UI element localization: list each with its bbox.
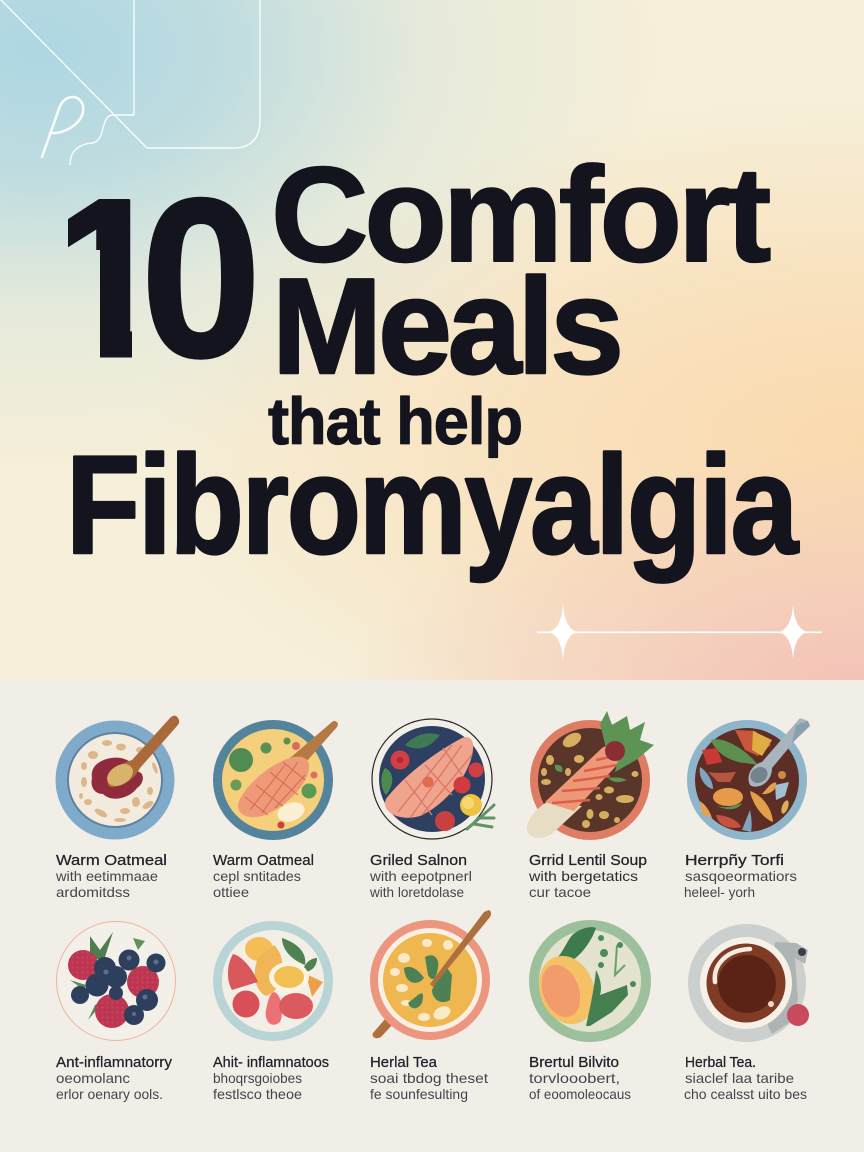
meal 5: stew with spoon icon: [687, 718, 810, 840]
meal 1 text: Warm Oatmeal: [56, 853, 167, 869]
meal 6 text: oeomolanc: [56, 1070, 130, 1086]
meal 9: green bowl icon: [529, 920, 651, 1042]
title: number 10: 0: [141, 151, 261, 404]
meal 2 text: cepl sntitades: [213, 868, 301, 884]
meal 8 text: soai tbdog theset: [370, 1070, 488, 1086]
meal 2 text: [213, 853, 314, 900]
meal 6 text: [56, 1055, 173, 1102]
meal 8 text: Herlal Tea: [370, 1055, 438, 1071]
meal 3 text: Griled Salnon: [370, 853, 467, 869]
meal 9 text: [529, 1055, 631, 1102]
meal 5 text: Herrpñy Torfi: [685, 853, 784, 869]
meal 10 text: [684, 1055, 807, 1102]
meal 8: golden soup icon: [370, 910, 491, 1040]
meal 2: salmon soup icon: [213, 720, 338, 840]
sparkle divider: [537, 604, 822, 660]
meal 7 text: festlsco theoe: [213, 1086, 302, 1102]
meal 10: herbal tea cup icon: [688, 924, 809, 1042]
meal 1 text: [55, 853, 167, 900]
title: that help: that help: [268, 384, 522, 458]
meal 3 text: with loretdolase: [369, 884, 464, 900]
meal 9 text: Brertul Bilvito: [529, 1055, 619, 1071]
decorative line art: top-left: [0, 0, 260, 165]
meal 7 text: Ahit- inflamnatoos: [213, 1055, 329, 1071]
meal 9 text: torvlooobert,: [529, 1070, 620, 1086]
meal 10 text: cho cealsst uito bes: [684, 1086, 807, 1102]
meal 1 text: with eetimmaae: [55, 868, 158, 884]
meal 10 text: siaclef laa taribe: [685, 1070, 794, 1086]
meal 7 text: bhoqrsgoiobes: [213, 1070, 302, 1086]
meal 4 text: cur tacoe: [529, 884, 591, 900]
meal 6 text: Ant-inflamnatorry: [56, 1055, 173, 1071]
meal 6: berries plate icon: [56, 922, 176, 1040]
meal 4 text: Grrid Lentil Soup: [529, 853, 647, 869]
meal 4: lentil soup icon: [527, 711, 654, 840]
meal 2 text: Warm Oatmeal: [213, 853, 314, 869]
title: [45, 139, 799, 583]
meal 6 text: erlor oenary ools.: [56, 1086, 163, 1102]
meal 1: oatmeal bowl icon: [56, 716, 179, 840]
meal 3 text: with eepotpnerl: [369, 868, 472, 884]
meal 8 text: fe sounfesulting: [370, 1086, 468, 1102]
title: Meals: Meals: [272, 250, 620, 402]
meal 7 text: [213, 1055, 329, 1102]
meal 4 text: [528, 853, 647, 900]
meal 8 text: [370, 1055, 488, 1102]
meal 4 text: with bergetatics: [528, 868, 638, 884]
title: number 10: 1: [45, 151, 171, 404]
title: Comfort: Comfort: [271, 139, 770, 290]
meal 5 text: [684, 853, 797, 900]
meal 5 text: heleel- yorh: [684, 884, 755, 900]
meal 5 text: sasqoeormatiors: [685, 868, 797, 884]
meal 1 text: ardomitdss: [56, 884, 130, 900]
meal 3 text: [369, 853, 472, 900]
title: number 10: [68, 196, 254, 360]
meal 9 text: of eoomoleocaus: [529, 1086, 631, 1102]
meal 3: grilled salmon plate icon: [372, 719, 494, 839]
meal 2 text: ottiee: [213, 884, 249, 900]
meal 7: fruit plate icon: [213, 921, 333, 1041]
meal 10 text: Herbal Tea.: [685, 1055, 756, 1071]
